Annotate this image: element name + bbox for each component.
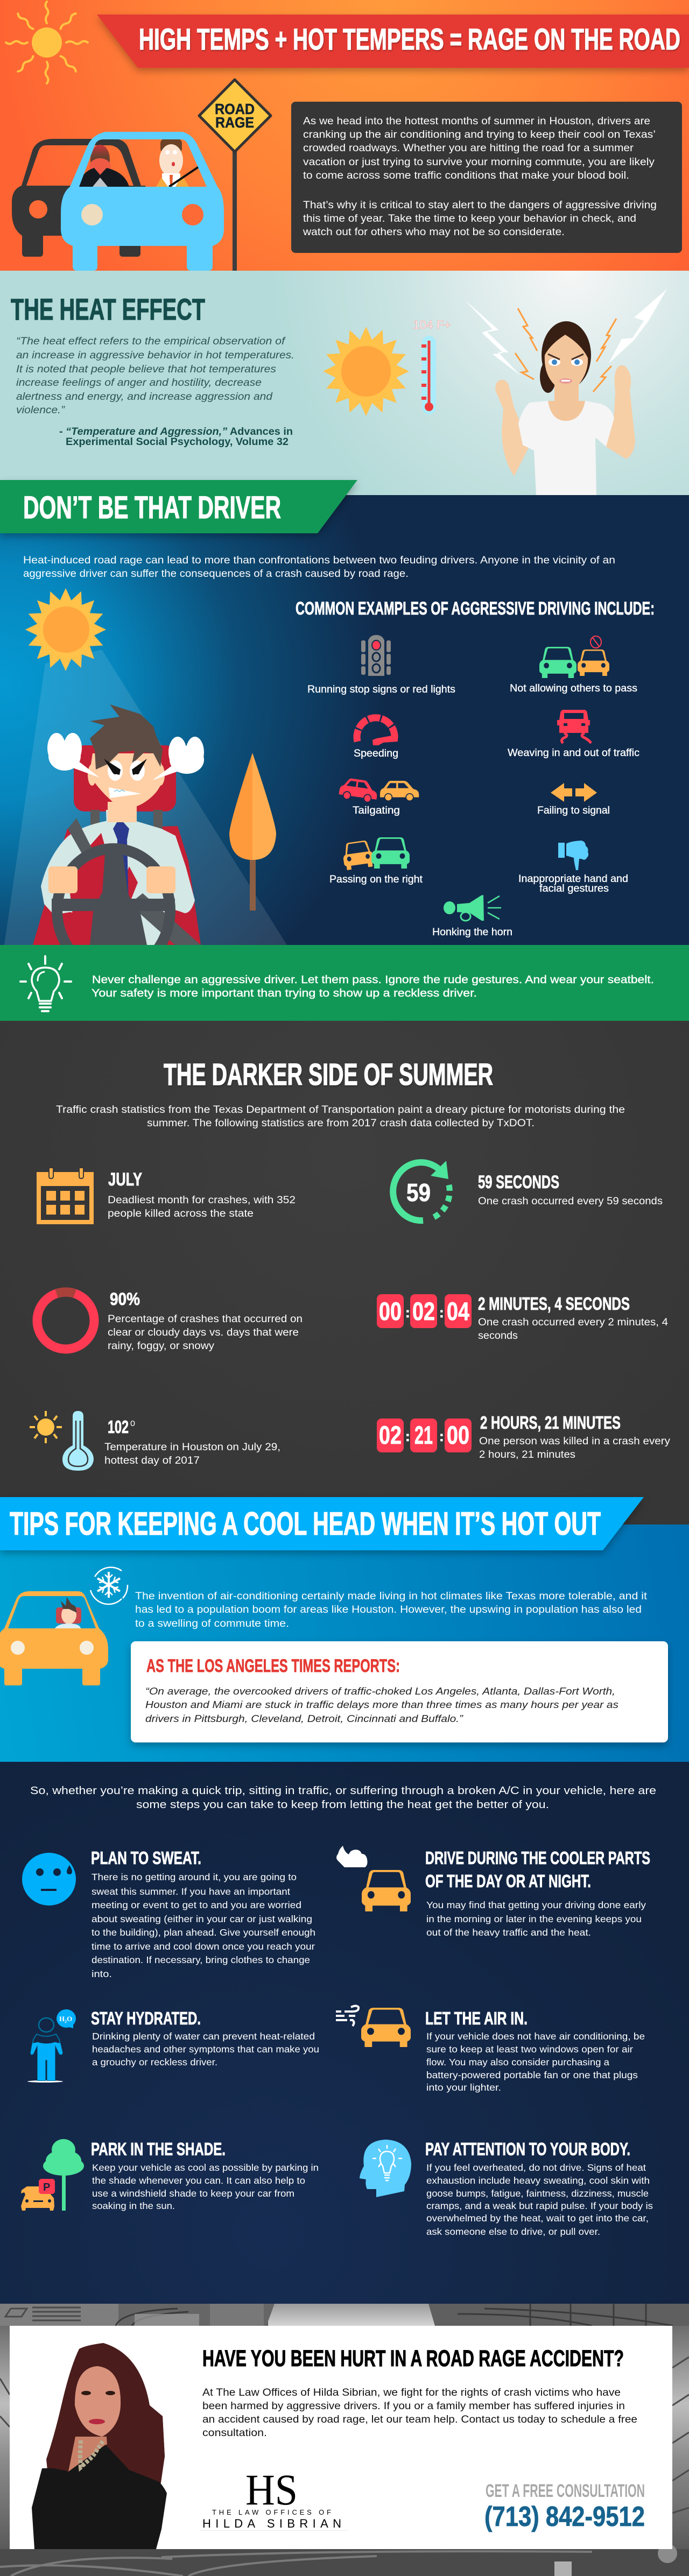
text: intro: Heat-induced road rage can lead to more than confrontations between two feuding drivers. Anyone in the vicinity of an xyxy=(23,555,615,566)
text panel: intro copy: watch out for others who may not be so considerate. xyxy=(303,227,565,238)
text panel: intro copy: to come across some traffic conditions that make your blood boil. xyxy=(303,170,629,181)
example: running stop signs: Running stop signs or red lights xyxy=(307,684,455,695)
text: safety advice xyxy=(92,974,654,999)
quote: heat effect definition: an increase in aggressive behavior in hot temperatures. xyxy=(16,350,294,361)
callout: safety band xyxy=(0,945,689,1021)
heading: the heat effect: THE HEAT EFFECT xyxy=(11,292,205,326)
icon: spiky sun xyxy=(323,327,409,416)
stat: 2 minutes 4 seconds: One crash occurred every 2 minutes, 4 xyxy=(478,1317,668,1328)
section: tips list xyxy=(0,1762,689,2304)
icon: thermometer 104 F+: 104 F+ xyxy=(413,318,451,331)
call to action: phone number: (713) 842-9512 xyxy=(484,2501,645,2532)
section: intro orange header xyxy=(0,0,689,271)
quote: heat effect definition: alertness and energy, and increase aggression and xyxy=(16,391,273,403)
stat: 90% xyxy=(37,1289,303,1352)
text panel: intro copy: this time of year. Take the time to keep your behavior in check, and xyxy=(303,213,636,224)
icon: road rage sign: RAGE xyxy=(215,114,254,131)
tip: stay hydrated: STAY HYDRATED. xyxy=(91,2008,201,2028)
tip: plan to sweat: meeting or event to get to and you are worried xyxy=(92,1900,301,1910)
banner: don't be that driver xyxy=(0,480,357,533)
stat: 2 hours 21 minutes: One person was killed in a crash every xyxy=(479,1436,671,1447)
example: inappropriate gestures: facial gestures xyxy=(539,883,609,894)
example: weaving in and out of traffic: Weaving in and out of traffic xyxy=(508,747,639,759)
callout: Los Angeles Times quote: AS THE LOS ANGELES TIMES REPORTS: xyxy=(146,1656,400,1676)
tip: stay hydrated: H xyxy=(59,2015,65,2023)
logo: law offices of Hilda Sibrian: THE LAW OFFICES OF xyxy=(212,2508,331,2516)
stat: 2 minutes 4 seconds xyxy=(377,1294,668,1342)
example: not allowing others to pass xyxy=(510,636,637,694)
text: intro xyxy=(23,555,615,580)
tip: drive during the cooler parts of the day: You may find that getting your driving done early xyxy=(426,1900,646,1910)
stat: 2 minutes 4 seconds: : xyxy=(439,1304,444,1321)
tip: stay hydrated: Drinking plenty of water can prevent heat-related xyxy=(92,2031,315,2042)
callout: Los Angeles Times quote: drivers in Pittsburgh, Cleveland, Detroit, Cincinnati and Buffalo.” xyxy=(145,1713,463,1724)
text: stats intro: summer. The following statistics are from 2017 crash data collected by TxDOT. xyxy=(147,1118,535,1129)
stat: 2 hours 21 minutes: 2 hours, 21 minutes xyxy=(479,1449,575,1460)
text: tips intro xyxy=(30,1785,656,1811)
section: the heat effect xyxy=(0,271,689,495)
section: the darker side of summer xyxy=(0,1021,689,1527)
stat: 2 minutes 4 seconds: 02 xyxy=(412,1297,435,1325)
stat: 90%: rainy, foggy, or snowy xyxy=(108,1340,215,1352)
stat: July: Deadliest month for crashes, with 352 xyxy=(108,1195,296,1206)
tip: pay attention to your body: overwhelmed by the heat, wait to get into the car, xyxy=(426,2213,649,2224)
callout: Los Angeles Times quote: Houston and Miami are stuck in traffic delays more than three times as many hours per year as xyxy=(145,1699,618,1710)
stat: 2 minutes 4 seconds: seconds xyxy=(478,1330,518,1342)
quote source xyxy=(59,426,293,448)
tip: plan to sweat: PLAN TO SWEAT. xyxy=(91,1848,201,1868)
tip: plan to sweat: sweat this summer. If you have an important xyxy=(92,1886,290,1897)
tip: let the air in: If your vehicle does not have air conditioning, be xyxy=(426,2031,645,2042)
stat: 2 hours 21 minutes: : xyxy=(439,1428,444,1444)
tip: let the air in: flow. You may also consider purchasing a xyxy=(426,2057,609,2067)
example: honking the horn: Honking the horn xyxy=(432,927,512,938)
logo: law offices of Hilda Sibrian xyxy=(200,2465,348,2531)
quote: heat effect definition xyxy=(16,336,294,416)
text: safety advice: Never challenge an aggressive driver. Let them pass. Ignore the rude gestures. And wear your seatbelt. xyxy=(92,974,654,986)
example: weaving in and out of traffic xyxy=(508,710,639,759)
example: honking the horn xyxy=(432,895,512,938)
text: tips intro: So, whether you’re making a quick trip, sitting in traffic, or suffering through a broken A/C in your vehicle, here are xyxy=(30,1785,656,1797)
stat: 59 seconds: 59 SECONDS xyxy=(478,1172,559,1192)
example: speeding xyxy=(354,718,398,759)
text panel: intro copy: cranking up the air conditioning and trying to keep their cool on Texas’ xyxy=(303,129,656,140)
tip: plan to sweat: to the building), plan ahead. Give yourself enough xyxy=(92,1927,315,1938)
tip: drive during the cooler parts of the day xyxy=(336,1846,650,1938)
text: air conditioning paragraph: The invention of air-conditioning certainly made living in hot climates like Texas more tolerable, and it xyxy=(135,1591,648,1602)
tip: plan to sweat: into. xyxy=(92,1968,112,1979)
tip: plan to sweat: There is no getting around it, you are going to xyxy=(92,1872,297,1882)
tip: pay attention to your body: ask someone else to drive, or pull over. xyxy=(426,2226,600,2237)
icon: snowflake air conditioning xyxy=(90,1568,128,1604)
tip: let the air in: into your lighter. xyxy=(426,2082,501,2093)
quote: heat effect definition: violence.” xyxy=(16,405,66,416)
icon: lightbulb xyxy=(20,956,71,1011)
light beam xyxy=(4,650,287,945)
text: stats intro: Traffic crash statistics from the Texas Department of Transportation paint a dreary picture for motorists during the xyxy=(56,1104,625,1116)
stat: 2 minutes 4 seconds: 04 xyxy=(447,1297,469,1325)
text: firm description: been harmed by aggressive drivers. If you or a family member has suffered injuries in xyxy=(202,2401,625,2412)
tip: let the air in xyxy=(336,2006,645,2093)
card: contact xyxy=(10,2326,672,2549)
tip: drive during the cooler parts of the day: in the morning or later in the evening keeps you xyxy=(426,1914,642,1924)
text: firm description: At The Law Offices of Hilda Sibrian, we fight for the rights of crash victims who have xyxy=(202,2387,621,2398)
tip: stay hydrated xyxy=(27,2008,319,2083)
stat: 2 minutes 4 seconds: : xyxy=(405,1304,410,1321)
text panel: intro copy: vacation or just trying to survive your morning commute, you are likely xyxy=(303,157,655,168)
section: don't be that driver xyxy=(0,480,689,972)
example: passing on the right: Passing on the right xyxy=(329,874,423,885)
tip: pay attention to your body: cramps, and a weak but rapid pulse. If your body is xyxy=(426,2200,653,2211)
banner: don't be that driver: DON’T BE THAT DRIVER xyxy=(23,490,281,525)
section: footer call to action xyxy=(0,2304,689,2576)
tip: pay attention to your body: goose bumps, fatigue, faintness, dizziness, muscle xyxy=(426,2188,649,2199)
tip: plan to sweat: destination. If necessary, bring clothes to change xyxy=(92,1954,310,1965)
example: passing on the right xyxy=(329,837,423,885)
tip: park in the shade: soaking in the sun. xyxy=(92,2200,175,2211)
text: air conditioning paragraph xyxy=(135,1591,648,1629)
text: safety advice: Your safety is more important than trying to show up a reckless driver. xyxy=(92,987,477,999)
text panel: intro copy xyxy=(291,102,682,253)
example: failing to signal: Failing to signal xyxy=(537,805,610,816)
call to action: phone number xyxy=(484,2481,645,2532)
quote: heat effect definition: It is noted that people believe that hot temperatures xyxy=(16,364,277,375)
tip: park in the shade: PARK IN THE SHADE. xyxy=(91,2139,226,2159)
illustration: angry woman with lightning xyxy=(465,289,667,495)
heading: darker side: THE DARKER SIDE OF SUMMER xyxy=(164,1057,493,1092)
tip: drive during the cooler parts of the day: OF THE DAY OR AT NIGHT. xyxy=(425,1871,591,1891)
stat: 2 hours 21 minutes xyxy=(377,1413,671,1460)
stat: 2 minutes 4 seconds: 2 MINUTES, 4 SECONDS xyxy=(478,1294,630,1314)
stat: 102 degrees xyxy=(30,1411,280,1471)
icon: wavy sun xyxy=(6,2,88,83)
tip: stay hydrated: headaches and other symptoms that can make you xyxy=(92,2044,319,2055)
example: tailgating xyxy=(338,777,419,816)
tip: pay attention to your body: If you feel overheated, do not drive. Signs of heat xyxy=(426,2162,646,2173)
background: city buildings xyxy=(0,2304,689,2576)
quote source: Experimental Social Psychology, Volume 32 xyxy=(66,436,289,448)
example: inappropriate gestures xyxy=(518,841,628,894)
tip: park in the shade: Keep your vehicle as cool as possible by parking in xyxy=(92,2162,319,2173)
example: inappropriate gestures: Inappropriate hand and xyxy=(518,873,628,885)
stat: 90%: Percentage of crashes that occurred on xyxy=(108,1314,303,1325)
example: not allowing others to pass: Not allowing others to pass xyxy=(510,683,637,694)
stat: 2 minutes 4 seconds: 00 xyxy=(379,1297,402,1325)
stat: 2 hours 21 minutes: 21 xyxy=(414,1421,433,1449)
banner: tips heading xyxy=(0,1497,644,1550)
tip: stay hydrated: O xyxy=(67,2015,72,2023)
tip: pay attention to your body: exhaustion include heavy sweating, cool skin with xyxy=(426,2175,650,2186)
stat: 2 hours 21 minutes: 02 xyxy=(379,1421,402,1449)
tip: stay hydrated: a grouchy or reckless driver. xyxy=(92,2057,217,2067)
stat: 59 seconds: 59 xyxy=(406,1178,431,1206)
stat: 90%: clear or cloudy days vs. days that were xyxy=(108,1327,299,1338)
text: stats intro xyxy=(56,1104,625,1129)
example: speeding: Speeding xyxy=(354,748,398,759)
stat: 59 seconds xyxy=(393,1161,663,1220)
icon: sun xyxy=(25,588,106,671)
example: running stop signs xyxy=(307,635,455,695)
example: failing to signal xyxy=(537,783,610,816)
illustration: angry driver at wheel xyxy=(33,704,204,972)
illustration: orange car with driver xyxy=(0,1591,108,1685)
icon: thermometer 104 F+ xyxy=(413,318,451,414)
stat: 102 degrees: 102 xyxy=(108,1417,129,1437)
quote source: - “Temperature and Aggression,” Advances in xyxy=(59,426,293,437)
illustration: two cars with drivers xyxy=(12,132,224,271)
callout: Los Angeles Times quote: “On average, the overcooked drivers of traffic-choked Los Angeles, Atlanta, Dallas-Fort Worth, xyxy=(145,1686,615,1697)
tip: park in the shade: P xyxy=(43,2182,50,2193)
text: air conditioning paragraph: to a swelling of commute time. xyxy=(135,1618,289,1629)
quote: heat effect definition: “The heat effect refers to the empirical observation of xyxy=(16,336,286,347)
icon: road rage sign xyxy=(199,80,271,271)
text: firm description: consultation. xyxy=(202,2427,267,2439)
text panel: intro copy: As we head into the hottest months of summer in Houston, drivers are xyxy=(303,116,650,127)
callout: Los Angeles Times quote xyxy=(131,1641,668,1742)
stat: July: people killed across the state xyxy=(108,1208,254,1219)
text: air conditioning paragraph: has led to a population boom for areas like Houston. However, the upswing in population has also led xyxy=(135,1604,642,1615)
logo: law offices of Hilda Sibrian: HILDA SIBRIAN xyxy=(202,2517,341,2530)
tip: park in the shade xyxy=(21,2139,319,2211)
section: tips for keeping a cool head xyxy=(0,1497,689,1762)
stat: July: JULY xyxy=(108,1169,142,1190)
tip: park in the shade: use a windshield shade to keep your car from xyxy=(92,2188,294,2199)
tip: let the air in: LET THE AIR IN. xyxy=(425,2008,528,2028)
stat: 2 hours 21 minutes: : xyxy=(405,1428,410,1444)
text panel: intro copy: crowded roadways. Whether you are hitting the road for a summer xyxy=(303,143,634,154)
stat: 102 degrees: 0 xyxy=(130,1419,135,1428)
illustration: tree xyxy=(229,753,276,911)
tip: stay hydrated: 2 xyxy=(65,2019,67,2024)
stat: July xyxy=(37,1168,296,1224)
text: firm description: an accident caused by road rage, let our team help. Contact us today to schedule a free xyxy=(202,2414,637,2425)
stat: 102 degrees: Temperature in Houston on July 29, xyxy=(104,1442,280,1453)
stat: 90%: 90% xyxy=(110,1289,140,1309)
tip: plan to sweat xyxy=(22,1848,315,1979)
photo placeholder: attorney portrait xyxy=(32,2343,167,2549)
stat: 2 hours 21 minutes: 00 xyxy=(447,1421,469,1449)
tip: plan to sweat: time to arrive and cool down once you reach your xyxy=(92,1941,315,1952)
text: intro: aggressive driver can suffer the consequences of a crash caused by road rage. xyxy=(23,568,409,580)
example: tailgating: Tailgating xyxy=(353,805,400,816)
stat: 59 seconds: One crash occurred every 59 seconds xyxy=(478,1196,663,1207)
text: tips intro: some steps you can take to keep from letting the heat get the better of you. xyxy=(136,1799,549,1811)
stat: 102 degrees: hottest day of 2017 xyxy=(104,1455,200,1466)
text: firm description xyxy=(202,2387,637,2439)
tip: park in the shade: the shade whenever you can. It can also help to xyxy=(92,2175,305,2186)
stat: 2 hours 21 minutes: 2 HOURS, 21 MINUTES xyxy=(480,1413,621,1432)
icon: road rage sign: ROAD xyxy=(215,101,255,117)
title banner xyxy=(97,15,689,68)
quote: heat effect definition: increase feelings of anger and hostility, decrease xyxy=(16,377,262,389)
tip: let the air in: sure to keep at least two windows open for air xyxy=(426,2044,633,2055)
text panel: intro copy: That’s why it is critical to stay alert to the dangers of aggressive driving xyxy=(303,200,657,211)
tip: let the air in: battery-powered portable fan or one that plugs xyxy=(426,2070,638,2080)
tip: pay attention to your body xyxy=(360,2139,653,2237)
tip: plan to sweat: about sweating (either in your car or just walking xyxy=(92,1914,312,1924)
logo: law offices of Hilda Sibrian: HS xyxy=(245,2465,298,2514)
tip: drive during the cooler parts of the day: out of the heavy traffic and the heat. xyxy=(426,1927,591,1938)
